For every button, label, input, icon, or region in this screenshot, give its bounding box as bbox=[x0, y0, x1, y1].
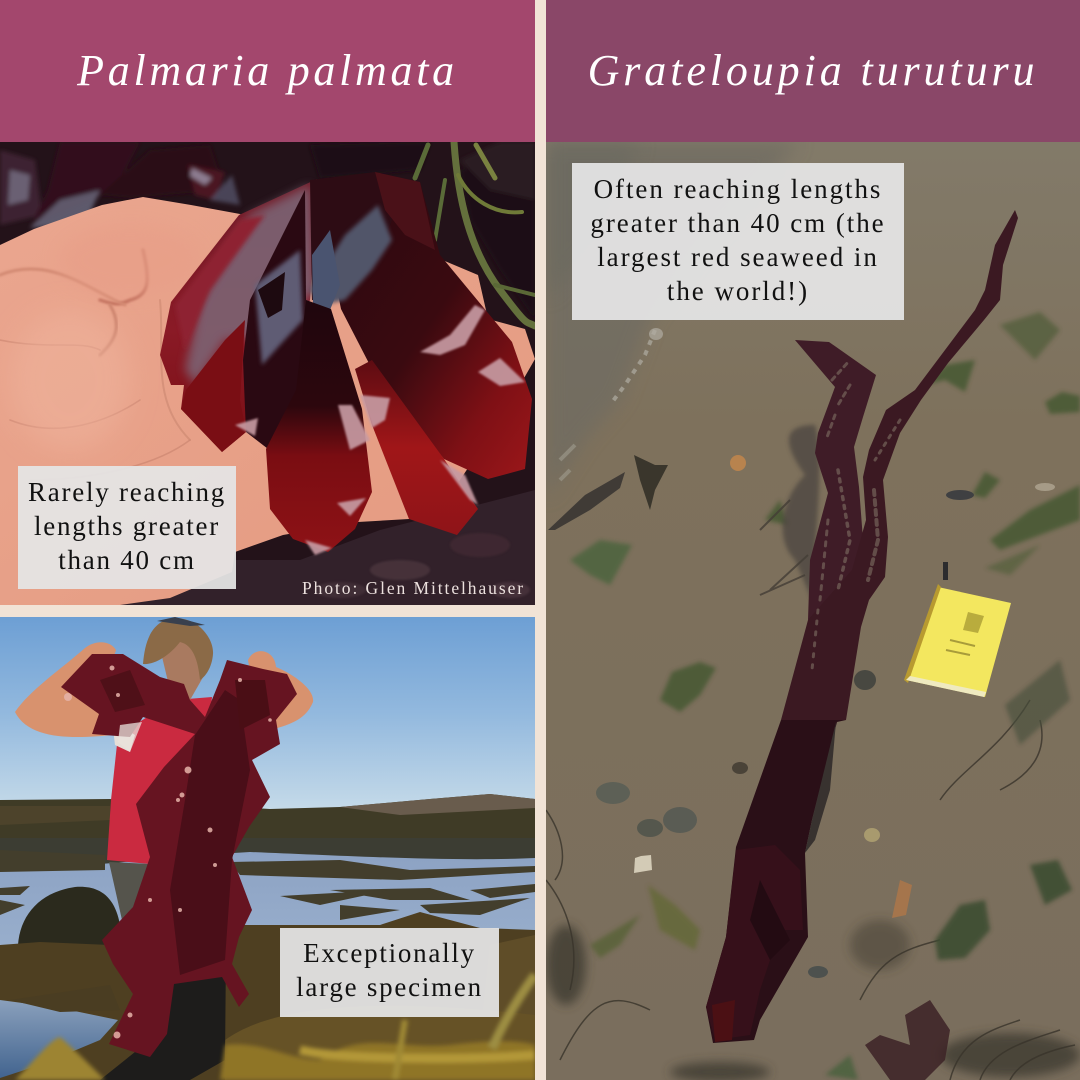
blade one bbox=[160, 179, 317, 452]
photo: Grateloupia turuturu on mudflat bbox=[546, 142, 1080, 1080]
photo: person holding large specimen bbox=[0, 617, 535, 1080]
blade two dark bbox=[243, 190, 306, 452]
foreground seaweed flats bbox=[0, 912, 535, 1080]
callout: Rarely reaching bbox=[18, 466, 236, 589]
callout: Exceptionally large specimen: large specimen bbox=[296, 972, 483, 1002]
person: legs bbox=[109, 862, 150, 920]
stones bbox=[596, 455, 1055, 978]
callout: Often reaching: largest red seaweed in bbox=[597, 242, 879, 272]
background weeds bbox=[0, 142, 535, 320]
lower blade bbox=[706, 720, 846, 1043]
stems bbox=[415, 142, 535, 326]
callout: Often reaching: greater than 40 cm (the bbox=[590, 208, 886, 238]
strand left bbox=[795, 340, 876, 620]
blurred foreground fronds bbox=[15, 975, 535, 1080]
photo: hand holding Palmaria palmata bbox=[0, 142, 535, 605]
callout: Exceptionally large specimen: Exceptionally bbox=[303, 938, 476, 968]
blade five right bbox=[324, 172, 532, 479]
icon: yellow notebook bbox=[904, 562, 1011, 697]
shallow water bbox=[546, 142, 800, 500]
heading: Grateloupia turuturu: Grateloupia turuturu bbox=[588, 46, 1038, 94]
hand bbox=[0, 197, 535, 605]
green patches bbox=[570, 312, 1080, 1080]
callout: Rarely reaching: lengths greater bbox=[34, 511, 220, 541]
left rock bbox=[18, 887, 120, 945]
seaweed long blade bbox=[706, 210, 1018, 1043]
person: shirt bbox=[107, 697, 212, 864]
lower fragment of red seaweed bbox=[865, 1000, 950, 1080]
heading: Palmaria palmata bbox=[0, 0, 535, 142]
callout: Often reaching bbox=[572, 163, 904, 320]
person: right arm bbox=[248, 651, 313, 730]
lower-left water bbox=[0, 1000, 118, 1078]
strand right bbox=[781, 210, 1018, 720]
heading: Palmaria palmata: Palmaria palmata bbox=[77, 46, 458, 94]
hand shading bbox=[0, 250, 190, 480]
blade three center bbox=[266, 300, 372, 552]
callout: Exceptionally large specimen bbox=[280, 928, 499, 1017]
tangled dark weed patches bbox=[546, 920, 1080, 1080]
callout: Often reaching: the world!) bbox=[667, 276, 809, 306]
glossy reflections bbox=[235, 305, 525, 555]
mottling bbox=[812, 360, 900, 670]
dark reflection bbox=[0, 838, 535, 870]
water bands bbox=[0, 850, 535, 920]
callout: Rarely reaching: than 40 cm bbox=[58, 545, 196, 575]
small dark seaweed bbox=[548, 455, 668, 530]
person: left arm bbox=[15, 642, 116, 737]
blade four bbox=[355, 360, 478, 535]
heading: Grateloupia turuturu bbox=[546, 0, 1080, 142]
bottom gravel bbox=[120, 490, 535, 605]
callout: Often reaching: Often reaching lengths bbox=[594, 174, 882, 204]
photo credit: Photo: Glen Mittelhauser bbox=[302, 578, 525, 598]
far shore bbox=[0, 794, 535, 838]
specimen bbox=[61, 654, 297, 1057]
person: head bbox=[158, 640, 206, 700]
callout: Rarely reaching: Rarely reaching bbox=[28, 477, 226, 507]
